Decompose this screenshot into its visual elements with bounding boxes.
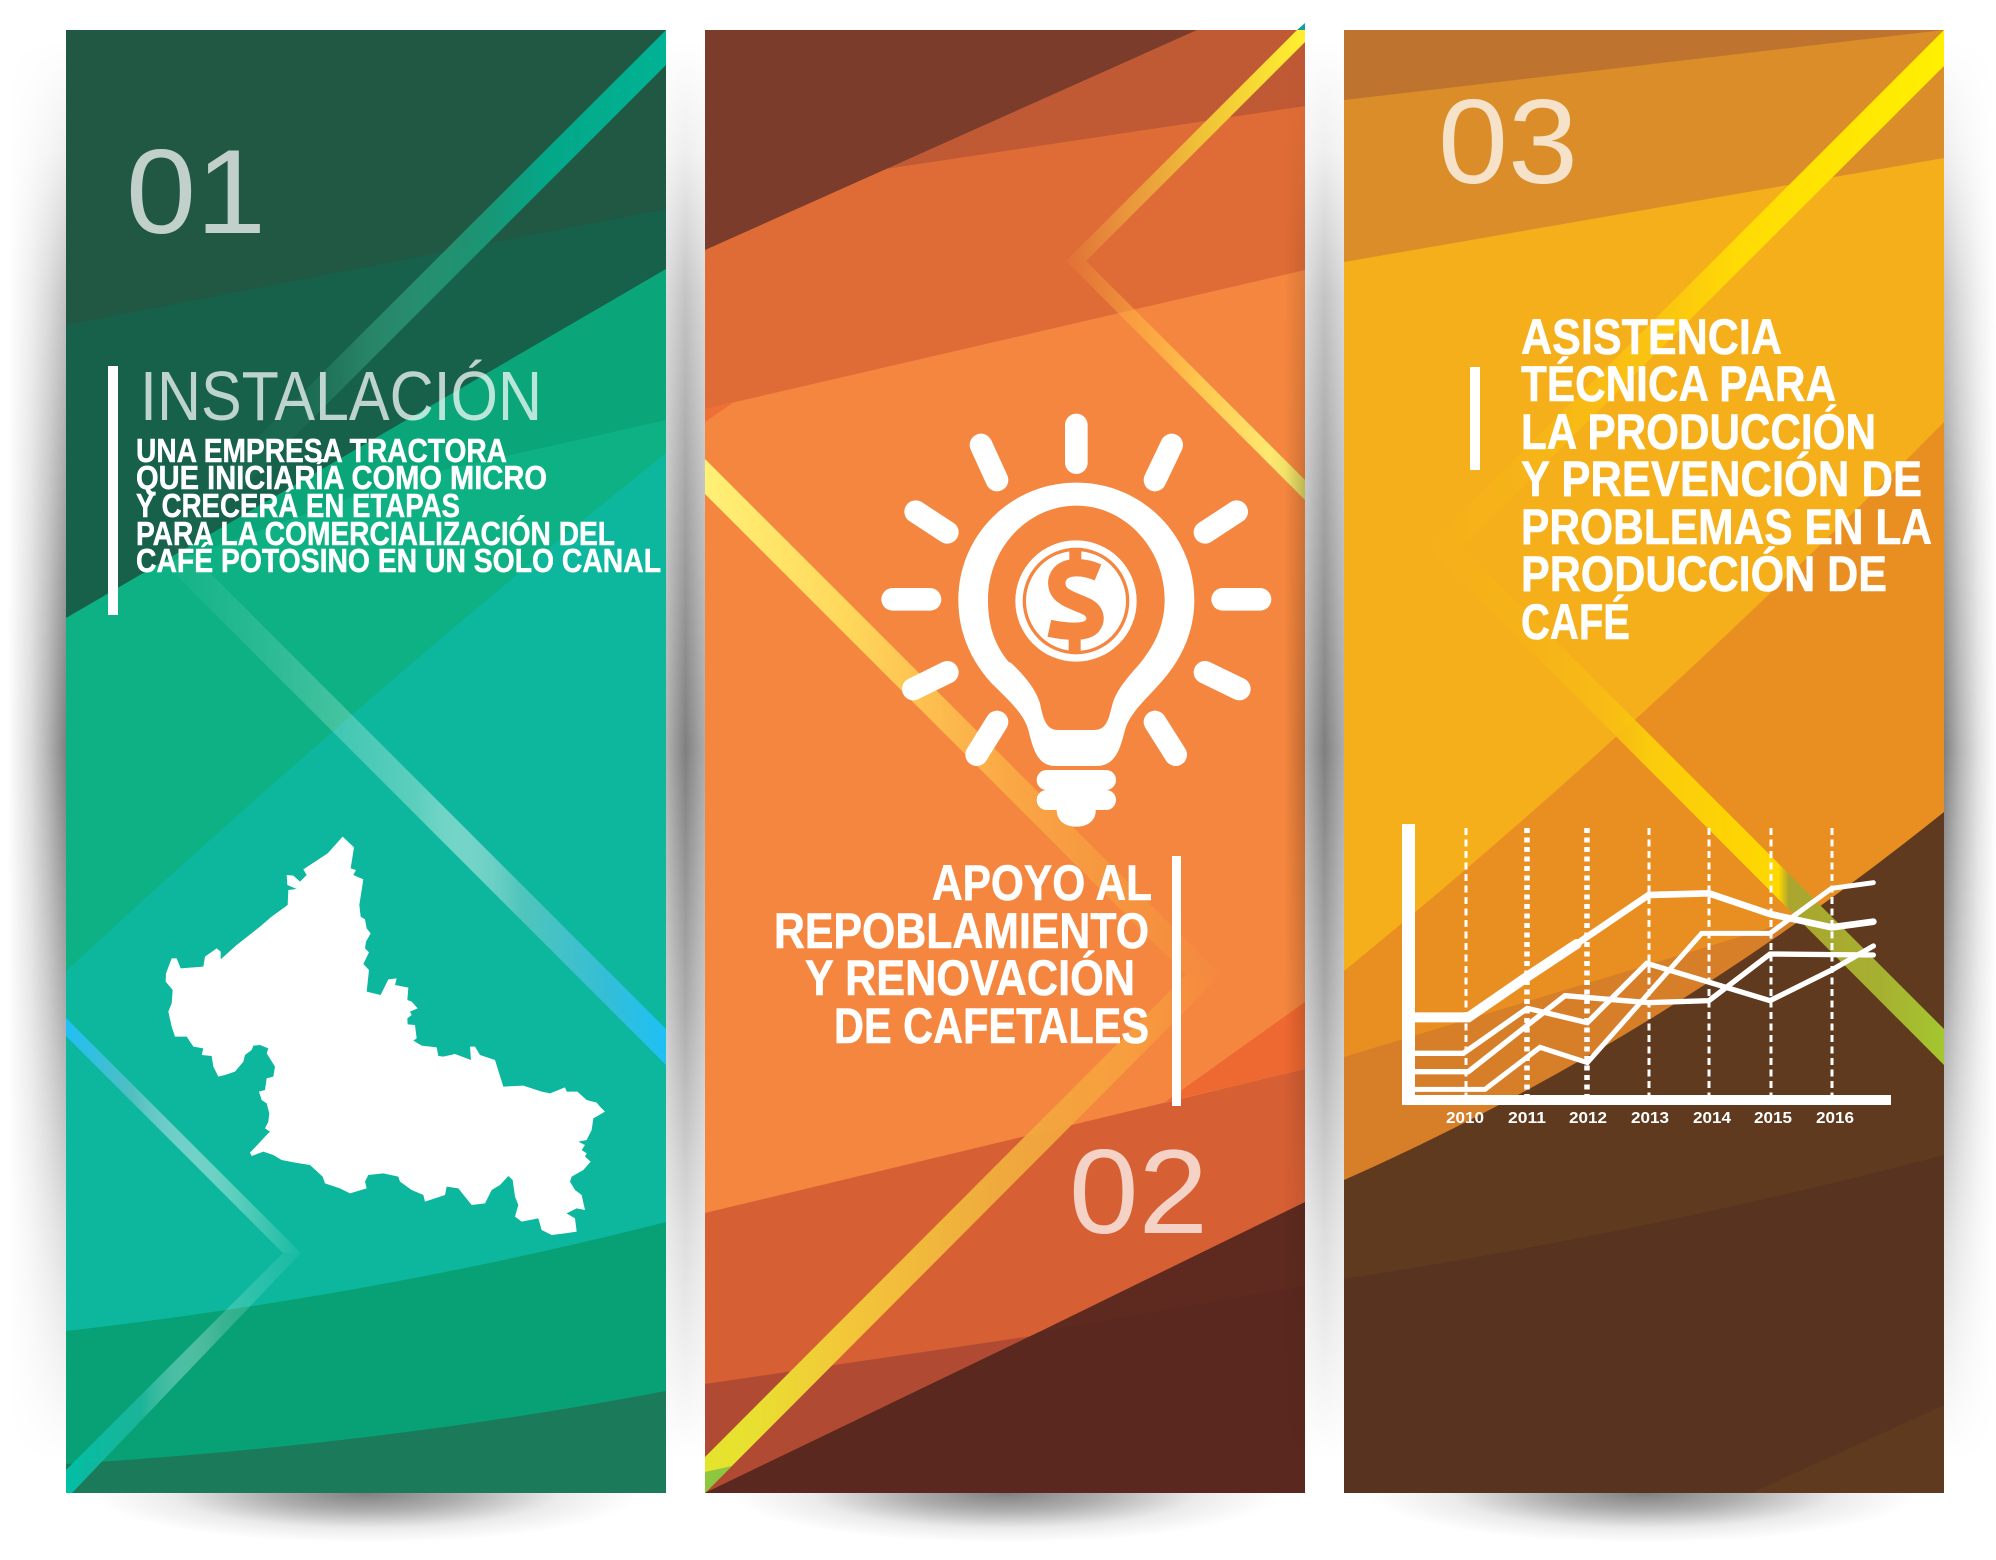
number 02: 02 — [1069, 1125, 1208, 1259]
accent bar — [108, 366, 118, 615]
description text: QUE INICIARÍA COMO MICRO — [136, 459, 547, 496]
panel 1 background layers — [66, 30, 666, 1493]
chart year labels — [1446, 1110, 1854, 1127]
chart year labels: 2010 — [1446, 1110, 1484, 1127]
chart data lines — [1415, 883, 1873, 1089]
panel 3 chevron stripes — [1554, 30, 1944, 1065]
panel 1 chevron stripes — [66, 30, 666, 1493]
chart year labels: 2015 — [1754, 1110, 1792, 1127]
description text: UNA EMPRESA TRACTORA — [136, 432, 507, 469]
panel 2 background layers — [705, 30, 1305, 1493]
chart axes — [1402, 824, 1891, 1105]
panel 2 chevron stripes — [705, 22, 1305, 1493]
map of San Luis Potosí — [166, 837, 605, 1235]
heading: asistencia técnica: PROBLEMAS EN LA — [1521, 499, 1932, 555]
bulb outline and base — [958, 483, 1194, 827]
dollar coin — [1015, 540, 1137, 662]
chart year labels: 2011 — [1508, 1110, 1546, 1127]
icon: light bulb with dollar coin — [893, 425, 1260, 827]
heading: asistencia técnica: ASISTENCIA — [1521, 309, 1782, 365]
description text — [136, 432, 661, 579]
heading: asistencia técnica: CAFÉ — [1521, 594, 1630, 650]
chart year labels: 2012 — [1569, 1110, 1607, 1127]
stripe tip over corner — [1297, 23, 1305, 30]
heading: asistencia técnica: TÉCNICA PARA — [1521, 356, 1836, 412]
heading: asistencia técnica: LA PRODUCCIÓN — [1521, 404, 1876, 460]
number 03: 03 — [1438, 75, 1578, 209]
panel: 02 apoyo al repoblamiento — [705, 22, 1305, 1493]
chart year labels: 2014 — [1693, 1110, 1731, 1127]
heading: apoyo al repoblamiento — [774, 855, 1152, 1054]
description text: CAFÉ POTOSINO EN UN SOLO CANAL — [136, 542, 661, 579]
chart year labels: 2016 — [1816, 1110, 1854, 1127]
line chart 2010-2016 — [1402, 824, 1891, 1127]
heading: asistencia técnica: PRODUCCIÓN DE — [1521, 546, 1887, 602]
chart year labels: 2013 — [1631, 1110, 1669, 1127]
panel: 01 instalación — [66, 30, 666, 1493]
panel 3 background layers — [1344, 30, 1944, 1493]
panel edge shadow — [1288, 171, 1305, 1206]
heading: asistencia técnica: Y PREVENCIÓN DE — [1521, 451, 1922, 507]
number 01: 01 — [126, 125, 266, 259]
heading: asistencia técnica — [1521, 309, 1932, 650]
heading: apoyo al repoblamiento: REPOBLAMIENTO — [774, 903, 1149, 959]
bulb rays — [893, 425, 1260, 755]
accent bar — [1172, 856, 1181, 1106]
heading: instalación: INSTALACIÓN — [140, 357, 542, 435]
accent bar — [1470, 367, 1480, 470]
heading: apoyo al repoblamiento: Y RENOVACIÓN — [805, 950, 1135, 1006]
panel: 03 asistencia técnica — [1344, 30, 1944, 1493]
chart year gridlines — [1466, 828, 1832, 1095]
heading: apoyo al repoblamiento: APOYO AL — [932, 855, 1152, 911]
description text: PARA LA COMERCIALIZACIÓN DEL — [136, 515, 615, 552]
heading: apoyo al repoblamiento: DE CAFETALES — [834, 998, 1149, 1054]
description text: Y CRECERÁ EN ETAPAS — [136, 487, 460, 524]
